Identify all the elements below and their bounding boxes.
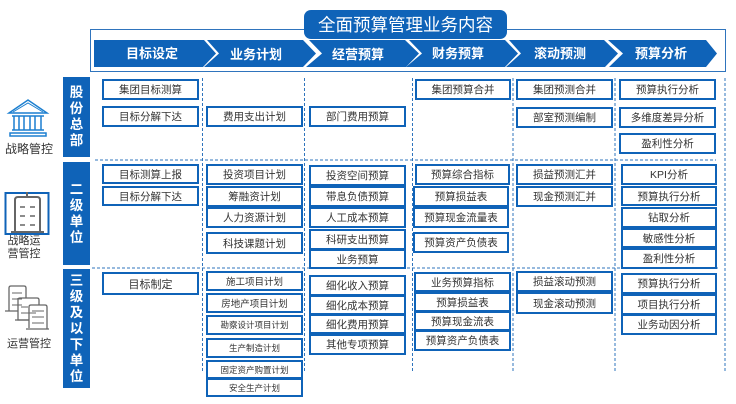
label: 战略运营管控 [8, 235, 40, 260]
column 3 boxes: 业务预算 [336, 254, 378, 266]
column 3 boxes: 细化费用预算 [326, 318, 389, 330]
column 6 boxes: 敏感性分析 [643, 232, 695, 244]
column 4 boxes: 预算现金流表 [431, 316, 494, 328]
column 2 boxes [206, 106, 303, 397]
column 2 boxes: 科技课题计划 [223, 238, 286, 250]
column 3 boxes [309, 106, 406, 355]
level: 三级及以下单位 [63, 269, 90, 388]
column 3 boxes: 人工成本预算 [326, 212, 389, 224]
column 4 boxes: 预算资产负债表 [424, 237, 498, 249]
title [304, 10, 507, 39]
column 2 boxes: 勘察设计项目计划 [220, 320, 288, 330]
level: 三级及以下单位: 三 [70, 272, 83, 288]
column 6 boxes: 预算执行分析 [638, 278, 700, 290]
column 4 boxes: 预算现金流量表 [424, 212, 498, 224]
level: 二级单位 [63, 162, 90, 265]
level: 三级及以下单位: 下 [70, 336, 83, 352]
column 3 boxes: 部门费用预算 [326, 111, 389, 123]
column 6 boxes: 项目执行分析 [638, 299, 700, 311]
column 3 boxes: 细化收入预算 [326, 280, 389, 292]
column 6 boxes: 钻取分析 [648, 212, 690, 224]
stage chevrons: 滚动预测 [534, 46, 586, 61]
column 6 boxes: 多维度差异分析 [631, 112, 704, 124]
header frame [90, 29, 726, 72]
column 4 boxes: 业务预算指标 [431, 276, 494, 288]
label: 战略管控: 战略管控 [5, 142, 53, 156]
level: 二级单位: 二 [70, 182, 83, 196]
column 5 boxes [516, 79, 613, 314]
label: 战略运营管控: 营管控 [8, 248, 40, 260]
column 2 boxes: 施工项目计划 [226, 277, 283, 288]
stage chevrons: 业务计划 [230, 47, 282, 62]
stage chevrons: 目标设定 [126, 46, 178, 61]
column 1 boxes [102, 79, 199, 295]
column 4 boxes: 预算综合指标 [431, 169, 494, 181]
column 2 boxes: 人力资源计划 [223, 212, 286, 224]
column 6 boxes: 盈利性分析 [641, 138, 694, 150]
column 5 boxes: 部室预测编制 [533, 112, 596, 124]
stage chevrons: 经营预算 [332, 47, 384, 62]
column 4 boxes: 集团预算合并 [432, 84, 494, 96]
label: 战略运营管控: 战略运 [8, 235, 40, 247]
column 5 boxes: 损益预测汇并 [533, 169, 596, 181]
column 3 boxes: 带息负债预算 [326, 191, 389, 203]
title: 全面预算管理业务内容 [318, 15, 493, 35]
column 3 boxes: 投资空间预算 [326, 170, 389, 182]
column 1 boxes: 目标分解下达 [119, 111, 182, 123]
level: 股份总部: 股 [70, 85, 83, 100]
label: 运营管控: 运营管控 [7, 338, 51, 350]
column 5 boxes: 现金预测汇并 [533, 191, 596, 203]
level: 二级单位: 级 [70, 198, 83, 212]
level: 二级单位: 位 [70, 230, 83, 244]
stage chevrons: 预算分析 [635, 46, 687, 61]
level: 股份总部 [63, 77, 90, 157]
column 2 boxes: 生产制造计划 [229, 343, 280, 353]
column 2 boxes: 房地产项目计划 [221, 299, 288, 310]
column 6 boxes: 预算执行分析 [636, 84, 699, 96]
column 4 boxes: 预算资产负债表 [426, 335, 499, 347]
column 6 boxes [619, 79, 717, 335]
stage chevrons: 财务预算 [432, 46, 484, 61]
level: 股份总部: 总 [70, 117, 83, 132]
column 2 boxes: 安全生产计划 [229, 382, 280, 392]
column 2 boxes: 投资项目计划 [223, 169, 286, 181]
level: 三级及以下单位: 及 [70, 304, 83, 320]
level: 股份总部: 份 [70, 101, 83, 116]
level: 三级及以下单位: 单 [70, 352, 83, 368]
column 2 boxes: 固定资产购置计划 [220, 364, 288, 374]
column 1 boxes: 目标测算上报 [119, 168, 182, 180]
column 5 boxes: 现金滚动预测 [533, 298, 596, 310]
level: 三级及以下单位: 级 [70, 288, 83, 304]
column 5 boxes: 集团预测合并 [533, 84, 596, 96]
column 3 boxes: 细化成本预算 [326, 300, 389, 312]
column 1 boxes: 目标制定 [128, 278, 172, 290]
level: 三级及以下单位: 以 [70, 320, 83, 336]
column 6 boxes: KPI分析 [650, 169, 688, 181]
column 4 boxes [413, 79, 511, 351]
column 3 boxes: 其他专项预算 [326, 339, 389, 351]
column 6 boxes: 业务动因分析 [638, 319, 700, 331]
column 6 boxes: 预算执行分析 [638, 190, 700, 202]
level: 股份总部: 部 [70, 133, 83, 148]
column 5 boxes: 损益滚动预测 [533, 276, 596, 288]
column 4 boxes: 预算损益表 [436, 296, 489, 308]
level: 三级及以下单位: 位 [70, 368, 83, 384]
level: 二级单位: 单 [70, 214, 83, 228]
column 6 boxes: 盈利性分析 [643, 253, 695, 265]
column 3 boxes: 科研支出预算 [326, 234, 389, 246]
column 1 boxes: 集团目标测算 [119, 84, 182, 96]
column 1 boxes: 目标分解下达 [119, 190, 182, 202]
column 2 boxes: 筹融资计划 [228, 191, 281, 203]
column 2 boxes: 费用支出计划 [223, 111, 286, 123]
column 4 boxes: 预算损益表 [435, 191, 487, 203]
